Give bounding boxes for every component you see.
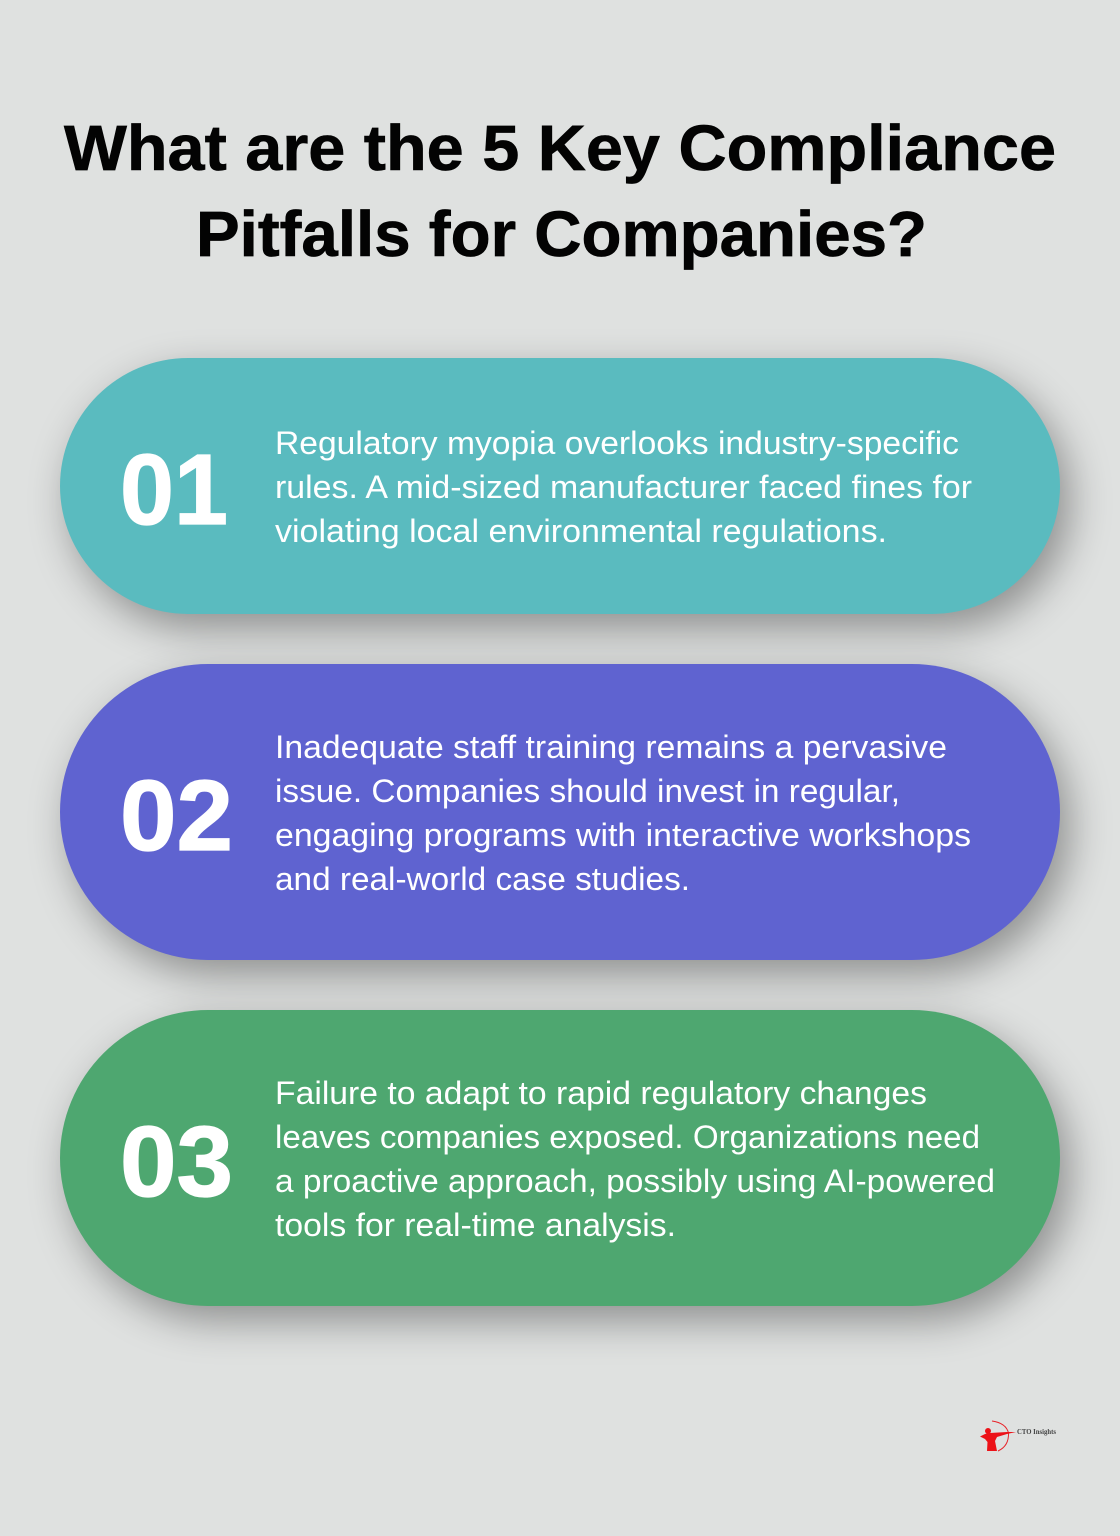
- text block: regulatory myopia: [275, 425, 972, 549]
- number 02: 02: [120, 760, 233, 872]
- pill background: purple: [60, 664, 1060, 960]
- text block: staff training: [275, 729, 971, 897]
- text block: regulatory changes: Failure to adapt to rapid regulatory changes: [275, 1075, 927, 1111]
- title: What are the 5 Key Compliance: [64, 112, 1056, 184]
- logo: CTO Insights: [980, 1421, 1056, 1451]
- text block: regulatory changes: leaves companies exposed. Organizations need: [275, 1119, 980, 1155]
- text block: regulatory changes: tools for real-time analysis.: [275, 1207, 676, 1243]
- text block: regulatory myopia: rules. A mid-sized manufacturer faced fines for: [275, 469, 972, 505]
- text block: regulatory myopia: violating local environmental regulations.: [275, 513, 887, 549]
- text block: staff training: and real-world case studies.: [275, 861, 690, 897]
- panel: pitfall 02: [60, 664, 1060, 960]
- title: Pitfalls for Companies?: [196, 198, 927, 270]
- number 03: 03: [120, 1106, 233, 1218]
- text block: regulatory changes: [275, 1075, 995, 1243]
- pill background: green: [60, 1010, 1060, 1306]
- text block: staff training: Inadequate staff training remains a pervasive: [275, 729, 947, 765]
- pill background: teal: [60, 358, 1060, 614]
- panel: pitfall 01: [60, 358, 1060, 614]
- number 01: 01: [120, 434, 228, 546]
- title: [64, 112, 1056, 270]
- panel: pitfall 03: [60, 1010, 1060, 1306]
- text block: regulatory changes: a proactive approach, possibly using AI-powered: [275, 1163, 995, 1199]
- logo wordmark: CTO Insights: [1017, 1428, 1056, 1436]
- text block: staff training: engaging programs with interactive workshops: [275, 817, 971, 853]
- text block: regulatory myopia: Regulatory myopia overlooks industry-specific: [275, 425, 959, 461]
- icon: red archer with bow: [980, 1421, 1016, 1451]
- text block: staff training: issue. Companies should invest in regular,: [275, 773, 900, 809]
